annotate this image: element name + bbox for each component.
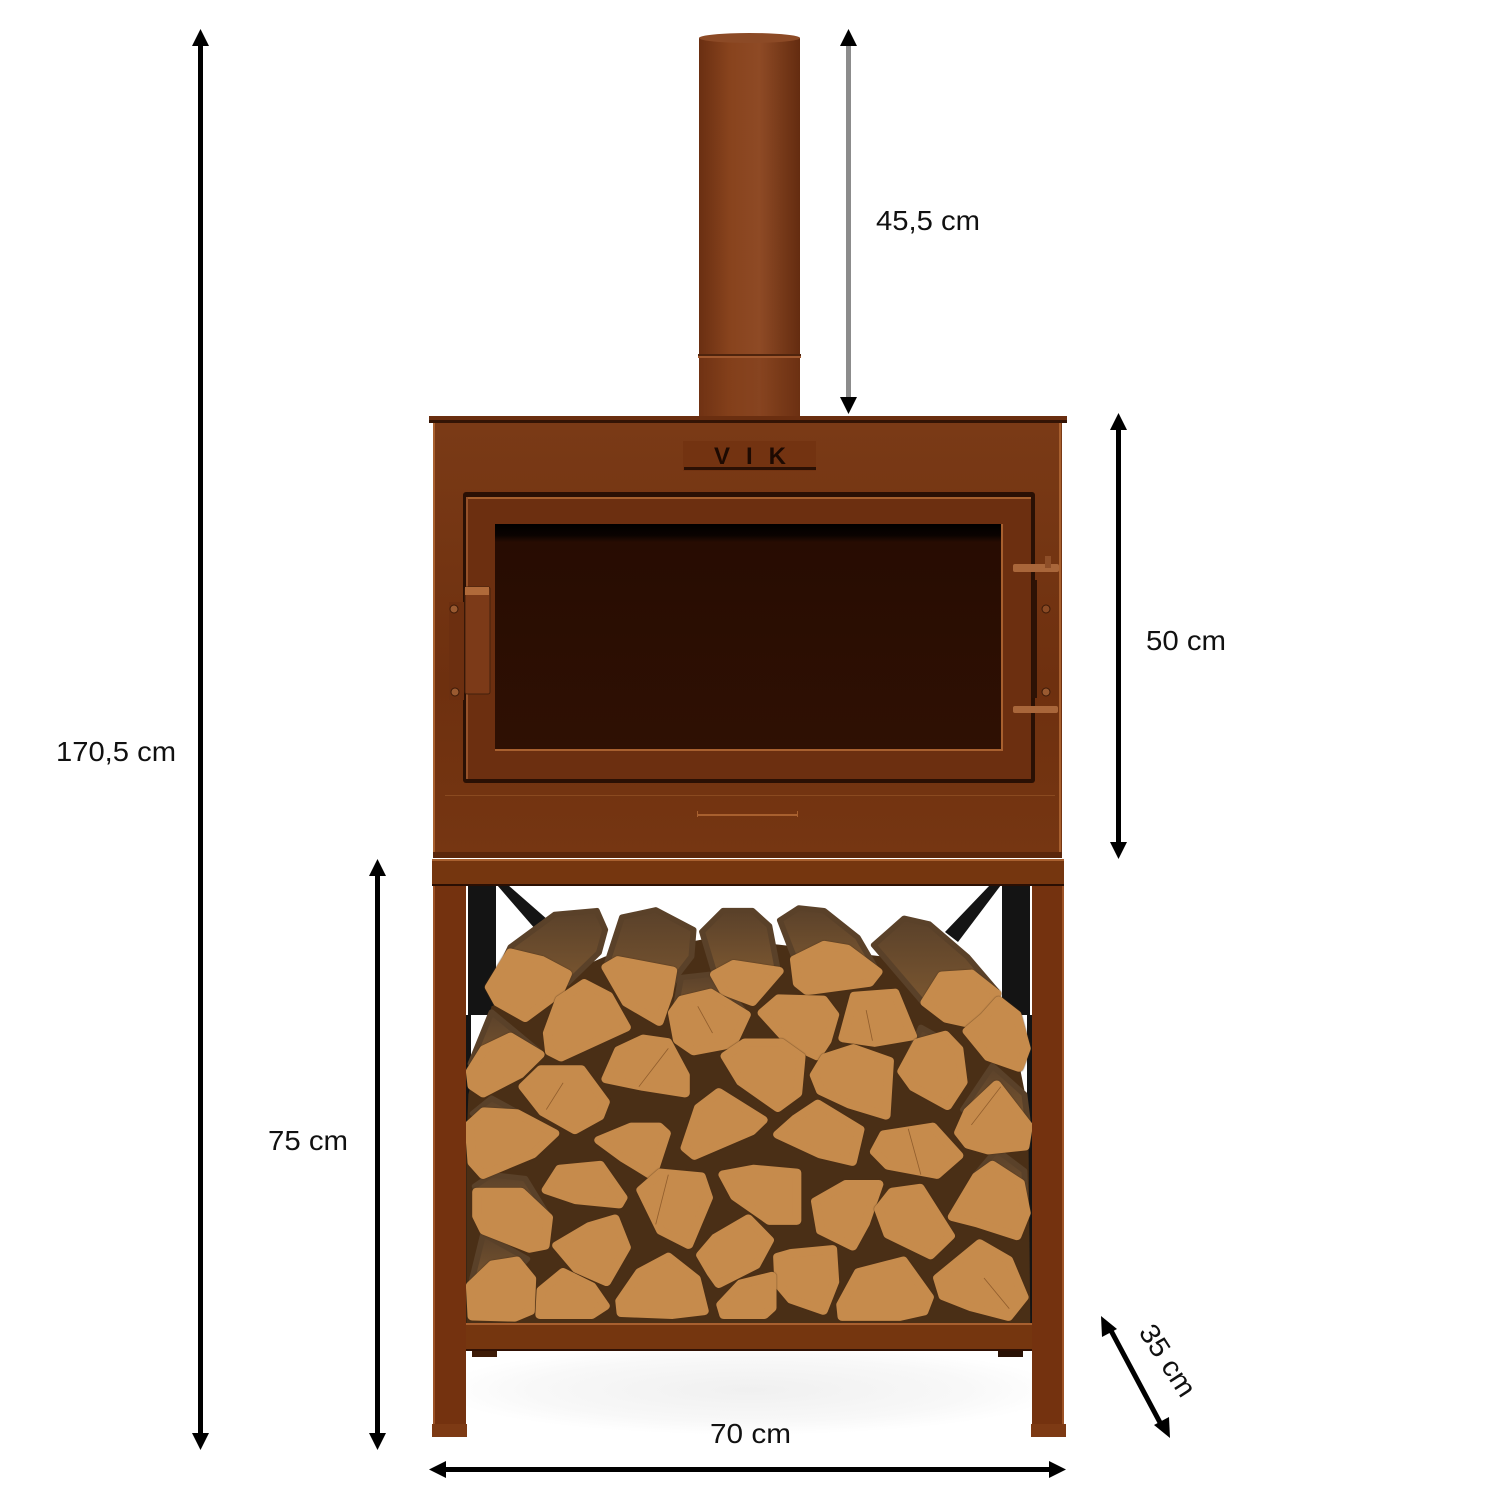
ash drawer <box>433 795 1062 858</box>
total height arrow <box>192 29 209 1450</box>
left handle <box>449 587 490 700</box>
door <box>463 492 1035 783</box>
left leg <box>432 886 467 1437</box>
door window <box>495 524 1002 750</box>
width arrow <box>429 1461 1066 1478</box>
label: stand height: 75 cm <box>268 1125 348 1156</box>
stove height arrow <box>1110 413 1127 859</box>
bottom rail <box>466 1323 1032 1351</box>
right foot pad <box>998 1351 1023 1357</box>
label: depth: 35 cm <box>1133 1318 1203 1402</box>
wood cracks <box>546 1006 1009 1309</box>
depth arrow <box>1101 1316 1170 1438</box>
left foot pad <box>472 1351 497 1357</box>
chimney <box>698 33 801 416</box>
stand top band <box>432 859 1064 886</box>
floor shadow <box>440 1345 1060 1435</box>
dark backing <box>466 937 1030 1326</box>
label: stove height: 50 cm <box>1146 625 1226 656</box>
right hinges <box>1013 556 1059 713</box>
black rear frame <box>466 885 1032 1325</box>
stand <box>432 859 1066 1437</box>
VIK brand plate: VIK <box>714 443 787 470</box>
label: total height: 170,5 cm <box>56 736 176 767</box>
top lip <box>429 416 1067 423</box>
label: width: 70 cm <box>710 1418 791 1449</box>
right leg <box>1031 886 1066 1437</box>
stand height arrow <box>369 859 386 1450</box>
VIK brand plate <box>683 441 816 471</box>
bark tops <box>471 908 1028 1286</box>
label: chimney height: 45,5 cm <box>876 205 980 236</box>
stove body <box>429 416 1067 858</box>
chimney height arrow <box>840 29 857 414</box>
firewood stack <box>466 908 1030 1326</box>
